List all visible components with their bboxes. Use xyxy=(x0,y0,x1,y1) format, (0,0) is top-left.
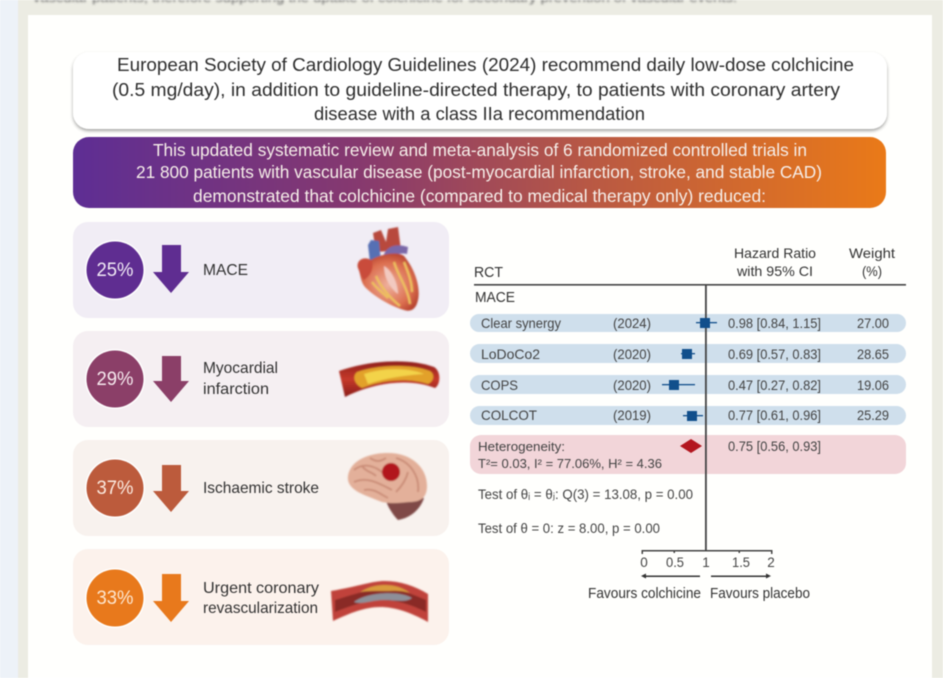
row: COLCOT: (2019) xyxy=(613,407,651,423)
direction labels: Favours placebo xyxy=(710,586,810,602)
table header: Hazard Ratio xyxy=(734,245,816,261)
row: pooled estimate and heterogeneity: Heterogeneity: xyxy=(478,439,565,454)
panel: guideline recommendation: disease with a class IIa recommendation xyxy=(314,103,645,124)
stat: 37%: 37% xyxy=(96,478,134,499)
forest plot xyxy=(470,245,906,602)
stat: 33% xyxy=(85,568,145,628)
row: COPS xyxy=(470,375,906,394)
test statistics: Test of θ = 0: z = 8.00, p = 0.00 xyxy=(478,520,660,536)
row: COPS: COPS xyxy=(481,377,518,393)
row: COLCOT: COLCOT xyxy=(481,407,537,423)
test statistics: Test of θᵢ = θⱼ: Q(3) = 13.08, p = 0.00 xyxy=(478,486,693,502)
label: urgent coronary revascularization: Urgent coronary xyxy=(203,580,319,597)
banner: study summary xyxy=(73,137,886,208)
stat: 25% xyxy=(85,240,145,300)
row: COPS: 19.06 xyxy=(857,377,889,393)
pooled effect diamond xyxy=(680,439,702,453)
row: Clear synergy: 27.00 xyxy=(857,315,889,331)
x axis xyxy=(640,550,775,570)
x axis: 1.5 xyxy=(732,555,750,570)
panel: guideline recommendation: (0.5 mg/day), in addition to guideline-directed therapy, to patients with coronary artery xyxy=(112,79,841,100)
arrow: down xyxy=(153,465,189,512)
table header: Weight xyxy=(849,245,895,261)
direction arrows xyxy=(641,574,771,578)
label: MACE: MACE xyxy=(203,262,248,279)
row: pooled estimate and heterogeneity: T²= 0.03, I² = 77.06%, H² = 4.36 xyxy=(478,456,662,471)
x axis: 2 xyxy=(767,555,775,570)
row: LoDoCo2: (2020) xyxy=(613,346,651,362)
panel: ischaemic stroke xyxy=(73,440,449,536)
arrow: down xyxy=(153,574,189,622)
direction labels: Favours colchicine xyxy=(588,586,701,602)
row: Clear synergy: Clear synergy xyxy=(481,315,561,331)
stat: 29%: 29% xyxy=(96,369,134,390)
panel: myocardial infarction xyxy=(73,331,449,427)
banner: study summary: demonstrated that colchicine (compared to medical therapy only) reduced: xyxy=(193,186,766,206)
row: COLCOT xyxy=(470,406,906,425)
table header: (%) xyxy=(862,263,882,279)
panel: guideline recommendation xyxy=(73,52,887,129)
row: COPS: (2020) xyxy=(613,377,651,393)
effect markers xyxy=(662,318,717,421)
row: COLCOT: 0.77 [0.61, 0.96] xyxy=(728,407,821,423)
row: COLCOT: 25.29 xyxy=(857,407,889,423)
banner: study summary: This updated systematic review and meta-analysis of 6 randomized controlled trials in xyxy=(153,140,807,160)
x axis: 1 xyxy=(702,555,710,570)
table header: with 95% CI xyxy=(736,263,813,279)
panel: urgent coronary revascularization xyxy=(73,549,449,645)
panel: MACE xyxy=(73,222,449,318)
direction labels xyxy=(588,586,810,602)
row: pooled estimate and heterogeneity: 0.75 [0.56, 0.93] xyxy=(728,438,821,454)
icon: stented artery xyxy=(331,581,428,622)
arrow: down xyxy=(153,356,189,402)
x axis: 0.5 xyxy=(666,555,684,570)
x axis: 0 xyxy=(640,555,648,570)
stat: 37% xyxy=(85,458,145,518)
row: Clear synergy: (2024) xyxy=(613,315,651,331)
panel: guideline recommendation: European Society of Cardiology Guidelines (2024) recommend daily low-dose colchicine xyxy=(117,54,854,75)
table header xyxy=(474,245,906,306)
arrow: down xyxy=(153,245,189,293)
label: myocardial infarction: infarction xyxy=(203,381,269,398)
label: ischaemic stroke: Ischaemic stroke xyxy=(203,480,319,497)
table header: RCT xyxy=(474,265,503,281)
row: LoDoCo2 xyxy=(470,344,906,363)
row: LoDoCo2: 0.69 [0.57, 0.83] xyxy=(728,346,821,362)
label: myocardial infarction: Myocardial xyxy=(203,360,278,377)
stat: 33%: 33% xyxy=(96,588,134,609)
icon: brain xyxy=(348,453,427,520)
table header: MACE xyxy=(475,290,515,306)
icon: heart xyxy=(358,227,419,311)
test statistics xyxy=(478,486,693,536)
row: Clear synergy: 0.98 [0.84, 1.15] xyxy=(728,315,821,331)
label: urgent coronary revascularization: revascularization xyxy=(203,600,318,617)
icon: artery with plaque xyxy=(339,361,439,397)
row: LoDoCo2: 28.65 xyxy=(857,346,889,362)
row: pooled estimate and heterogeneity xyxy=(470,435,906,474)
row: LoDoCo2: LoDoCo2 xyxy=(481,346,540,362)
row: Clear synergy xyxy=(470,314,906,332)
stat: 29% xyxy=(85,349,145,409)
reference line xyxy=(705,285,707,551)
banner: study summary: 21 800 patients with vascular disease (post-myocardial infarction, stroke, and stable CAD) xyxy=(136,162,822,182)
stat: 25%: 25% xyxy=(96,260,134,281)
row: COPS: 0.47 [0.27, 0.82] xyxy=(728,377,821,393)
